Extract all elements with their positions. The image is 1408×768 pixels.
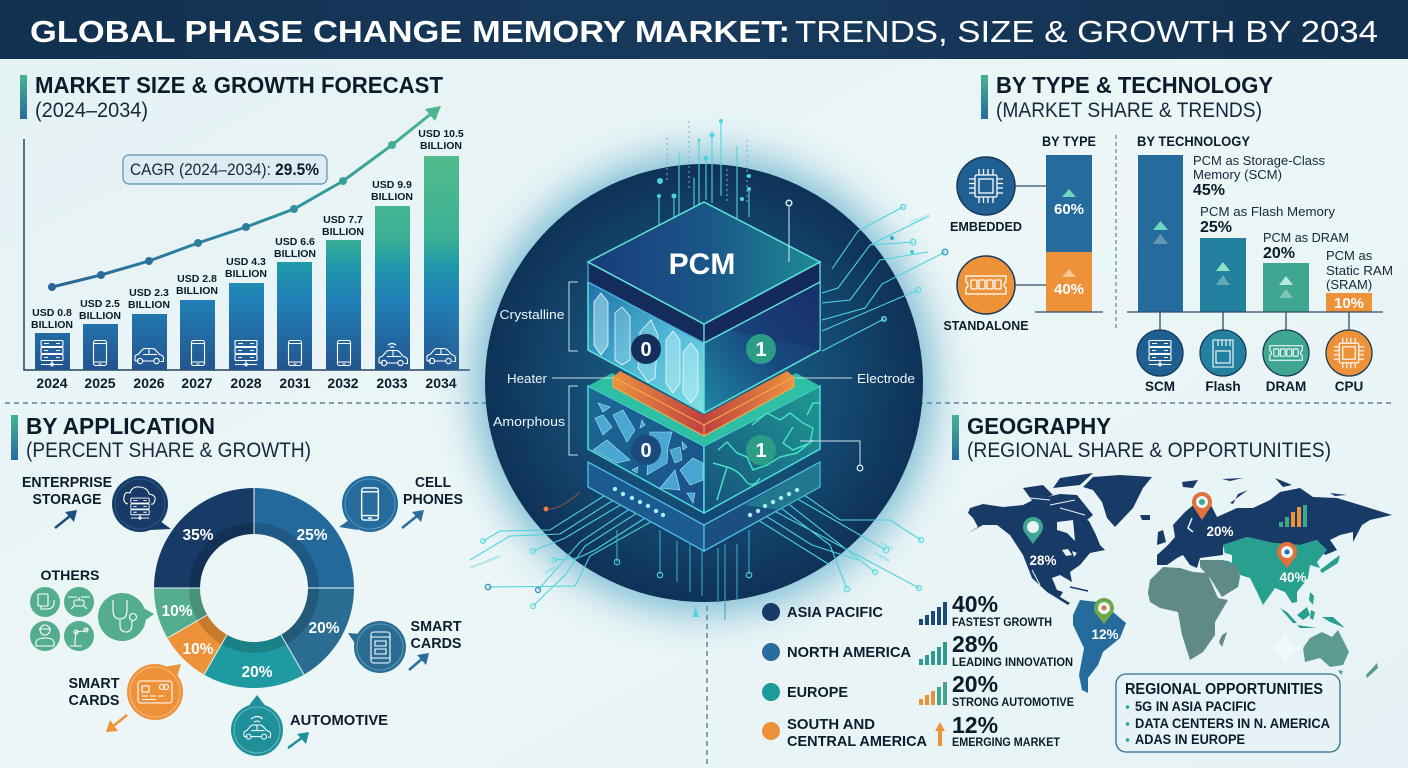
legend: regions: CENTRAL AMERICA (787, 733, 927, 750)
bar chart: market size by year (24, 128, 470, 391)
label: cell phones (339, 475, 463, 532)
crystals (594, 293, 698, 403)
bar chart: market size by year: 2027 (181, 375, 213, 391)
heading: by type and technology: BY TYPE & TECHNOLOGY (996, 72, 1273, 98)
map percentages (1029, 524, 1307, 642)
bar chart: market size by year: USD 2.3 (129, 287, 169, 299)
label: smart cards (blue) (348, 619, 462, 673)
callout: regional opportunities: ADAS IN EUROPE (1135, 732, 1245, 747)
bar chart: market size by year: 2028 (230, 375, 262, 391)
bar chart: market size by year: 2024 (36, 375, 68, 391)
bar chart: market size by year: BILLION (420, 140, 462, 152)
regional stats: FASTEST GROWTH (952, 617, 1052, 629)
bar chart: market size by year: BILLION (128, 299, 170, 311)
panel: by type and technology (944, 72, 1393, 394)
by technology bar chart (1127, 134, 1393, 330)
donut chart: application share: 20% (308, 620, 340, 637)
state labels: Crystalline (500, 307, 564, 322)
regional stats: LEADING INNOVATION (952, 657, 1073, 669)
circuit traces: top (657, 119, 751, 248)
binary state badges: 1 (755, 339, 767, 361)
by technology bar chart: PCM as (1326, 248, 1373, 263)
regional stats: STRONG AUTOMOTIVE (952, 697, 1074, 709)
by technology bar chart: 20% (1263, 245, 1295, 262)
legend: regions: EUROPE (787, 684, 848, 701)
by technology bar chart: 10% (1334, 295, 1364, 312)
heading: by application: (PERCENT SHARE & GROWTH) (26, 439, 311, 462)
greenland and north america (968, 473, 1152, 605)
legend: regions: ASIA PACIFIC (787, 604, 883, 621)
bar chart: market size by year: USD 0.8 (32, 307, 72, 319)
heading: geography: (REGIONAL SHARE & OPPORTUNITIES) (967, 439, 1331, 462)
mini bars on map (1279, 505, 1307, 527)
bar chart: market size by year: USD 2.5 (80, 298, 120, 310)
map percentages: 40% (1279, 570, 1307, 585)
bar chart: market size by year: BILLION (225, 268, 267, 280)
title banner (0, 0, 1408, 59)
icon: embedded chip: EMBEDDED (950, 220, 1022, 234)
by technology bar chart: 25% (1200, 219, 1232, 236)
circuit traces: lower right (748, 488, 924, 592)
callout: CAGR: CAGR (2024–2034): 29.5% (130, 161, 319, 179)
dark disc (485, 164, 923, 602)
heading: by type and technology (981, 72, 1273, 122)
bar chart: market size by year: 2025 (84, 375, 116, 391)
by technology bar chart: PCM as DRAM (1263, 230, 1349, 245)
regional stats (919, 591, 1074, 749)
bar chart: market size by year: USD 2.8 (177, 273, 217, 285)
heading: by application (11, 413, 311, 462)
legend: regions: SOUTH AND (787, 716, 875, 733)
bar chart: market size by year: BILLION (371, 191, 413, 203)
label: automotive (231, 695, 388, 756)
state labels: Electrode (857, 371, 915, 386)
bar chart: market size by year: BILLION (31, 319, 73, 331)
bar chart: market size by year: USD 6.6 (275, 236, 315, 248)
bar chart: market size by year: USD 7.7 (323, 214, 363, 226)
binary state badges (631, 334, 776, 465)
callout: regional opportunities: 5G IN ASIA PACIFIC (1135, 699, 1256, 714)
icon: flash: Flash (1205, 379, 1241, 394)
donut chart: application share: 20% (241, 664, 273, 681)
by type stacked bar: BY TYPE (1042, 134, 1096, 149)
donut chart: application share: 10% (182, 641, 214, 658)
europe and russia (1157, 478, 1392, 568)
bar chart: market size by year: USD 4.3 (226, 256, 266, 268)
by technology bar chart: (SRAM) (1326, 277, 1372, 292)
world map (968, 473, 1392, 693)
bar chart: market size by year: USD 10.5 (418, 128, 464, 140)
icon: DRAM: DRAM (1266, 379, 1306, 394)
heading: market size: (2024–2034) (35, 99, 148, 122)
label: cell phones: CELL (415, 475, 451, 491)
label: smart cards (blue): SMART (410, 619, 462, 635)
legend: regions: NORTH AMERICA (787, 644, 911, 661)
title banner: TRENDS, SIZE & GROWTH BY 2034 (795, 14, 1378, 49)
by technology bar chart: BY TECHNOLOGY (1137, 134, 1250, 149)
state labels (493, 282, 915, 455)
label: others (30, 567, 154, 651)
soft glow behind disc (474, 153, 934, 613)
label: automotive: AUTOMOTIVE (290, 713, 388, 729)
title banner: GLOBAL PHASE CHANGE MEMORY MARKET: (30, 14, 790, 49)
panel: geography (762, 413, 1392, 752)
icon: embedded chip (950, 157, 1022, 234)
donut chart: application share: 35% (182, 527, 214, 544)
by technology bar chart: Memory (SCM) (1193, 167, 1282, 182)
regional stats: 40% (952, 591, 998, 617)
bar chart: market size by year: 2033 (376, 375, 408, 391)
callout: regional opportunities (1116, 674, 1340, 752)
upper block: crystalline (588, 200, 820, 413)
regional stats: 20% (952, 671, 998, 697)
by type stacked bar (1015, 134, 1103, 312)
legend: regions (762, 603, 927, 750)
pin: south america (1094, 598, 1114, 624)
bar chart: market size by year: 2031 (279, 375, 311, 391)
callout: regional opportunities: DATA CENTERS IN N. AMERICA (1135, 716, 1330, 731)
pin: europe (1192, 492, 1212, 520)
label: PCM: PCM (669, 248, 735, 281)
lower block: amorphous (588, 373, 863, 513)
heading: by application: BY APPLICATION (26, 413, 215, 439)
bar chart: market size by year: 2034 (425, 375, 457, 391)
pin: asia pacific (1277, 542, 1297, 568)
bar chart: market size by year: BILLION (322, 226, 364, 238)
by technology bar chart: 45% (1193, 182, 1225, 199)
donut chart: application share: 10% (161, 603, 193, 620)
label: enterprise storage: STORAGE (32, 492, 102, 508)
heater strip (613, 371, 794, 436)
label: smart cards (orange): CARDS (68, 693, 120, 709)
icon: SCM: SCM (1145, 379, 1175, 394)
icon: CPU: CPU (1335, 379, 1363, 394)
heading: market size (20, 72, 443, 122)
icon: CPU (1326, 330, 1372, 394)
donut chart: application share (154, 488, 354, 688)
binary state badges: 0 (640, 440, 652, 462)
regional stats: 28% (952, 631, 998, 657)
bar chart: market size by year: 2032 (327, 375, 359, 391)
by technology bar chart: PCM as Flash Memory (1200, 204, 1335, 219)
map percentages: 12% (1091, 627, 1119, 642)
binary state badges: 1 (755, 440, 767, 462)
heading: geography (952, 413, 1331, 462)
state labels: Heater (507, 371, 548, 386)
donut chart: application share: 25% (296, 527, 328, 544)
by type stacked bar: 40% (1054, 281, 1084, 298)
circuit traces: bottom (614, 530, 752, 620)
asia (1223, 537, 1345, 628)
bar chart: market size by year: BILLION (176, 285, 218, 297)
icon: DRAM (1263, 330, 1309, 394)
label: smart cards (orange): SMART (68, 676, 120, 692)
map percentages: 28% (1029, 553, 1057, 568)
panel: by application (11, 413, 463, 756)
icon: standalone memory: STANDALONE (944, 319, 1028, 333)
state labels: Amorphous (493, 414, 566, 429)
circuit traces: lower left (470, 487, 665, 608)
panel: central PCM cell illustration (470, 119, 948, 620)
south america (1073, 600, 1126, 693)
pin: north america (1023, 517, 1043, 544)
africa and middle east (1148, 560, 1240, 660)
icon: standalone memory (944, 256, 1028, 333)
label: smart cards (blue): CARDS (410, 636, 462, 652)
label: enterprise storage: ENTERPRISE (22, 475, 112, 491)
heading: by type and technology: (MARKET SHARE & TRENDS) (996, 99, 1262, 122)
growth trend line with arrow (48, 106, 441, 291)
map percentages: 20% (1206, 524, 1234, 539)
by technology bar chart: Static RAM (1326, 263, 1393, 278)
heading: geography: GEOGRAPHY (967, 413, 1111, 439)
label: cell phones: PHONES (403, 492, 463, 508)
label: enterprise storage (22, 475, 171, 532)
bar chart: market size by year: USD 9.9 (372, 179, 412, 191)
by type stacked bar: 60% (1054, 201, 1084, 218)
binary state badges: 0 (640, 339, 652, 361)
sparkle (1265, 628, 1305, 668)
panel: market size and growth forecast (20, 72, 470, 391)
label: others: OTHERS (40, 567, 100, 583)
australia and new zealand (1303, 630, 1378, 678)
callout: regional opportunities: REGIONAL OPPORTUNITIES (1125, 681, 1323, 698)
base layer (588, 462, 820, 551)
bar chart: market size by year: 2026 (133, 375, 165, 391)
bar chart: market size by year: BILLION (274, 248, 316, 260)
callout: CAGR (123, 155, 327, 184)
regional stats: 12% (952, 712, 998, 738)
circuit traces: upper right (822, 204, 948, 351)
regional stats: EMERGING MARKET (952, 737, 1060, 749)
by technology bar chart: PCM as Storage-Class (1193, 153, 1325, 168)
heading: market size: MARKET SIZE & GROWTH FORECAST (35, 72, 443, 98)
icon: flash (1200, 330, 1246, 394)
label: smart cards (orange) (68, 664, 183, 732)
bar chart: market size by year: BILLION (79, 310, 121, 322)
icon: SCM (1137, 330, 1183, 394)
